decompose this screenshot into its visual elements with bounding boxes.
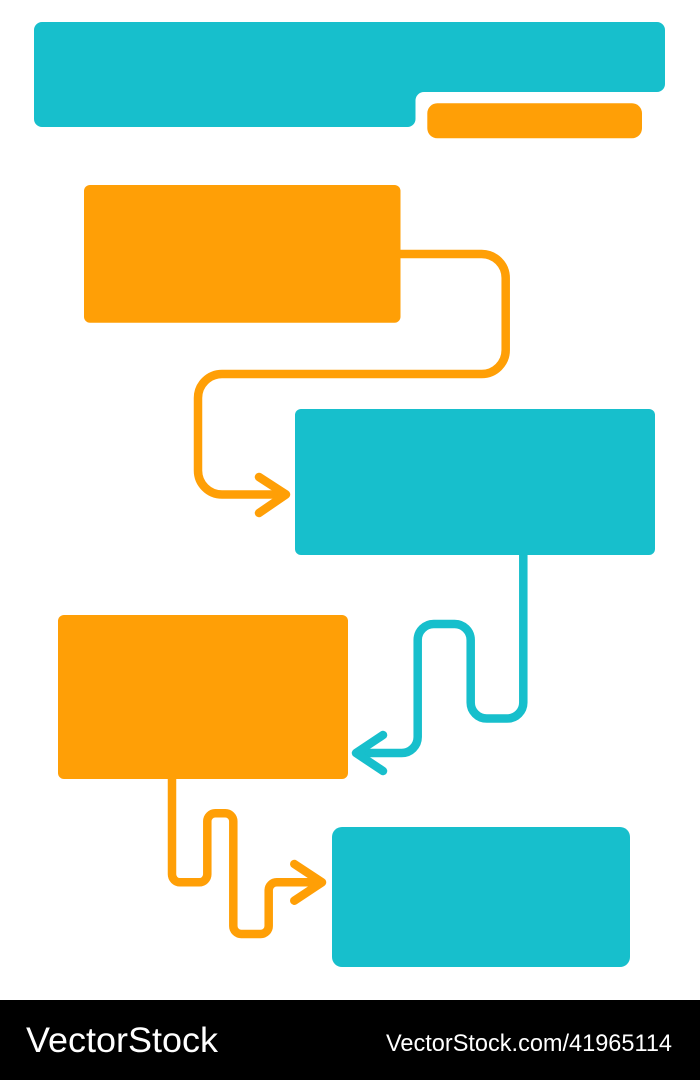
panel: step 1	[84, 185, 400, 323]
footer url: VectorStock.com/41965114	[386, 1030, 672, 1057]
footer bar	[0, 1000, 700, 1080]
panel: step 3	[58, 615, 348, 779]
panel: step 2	[295, 409, 655, 555]
subtitle pill	[427, 103, 642, 138]
panel: step 4	[332, 827, 630, 967]
footer logo: VectorStock	[26, 1021, 219, 1060]
arrow: step 2 to step 3	[356, 555, 523, 771]
arrow: step 1 to step 2	[198, 254, 506, 513]
arrow: step 3 to step 4	[172, 779, 322, 934]
title banner	[34, 22, 665, 127]
